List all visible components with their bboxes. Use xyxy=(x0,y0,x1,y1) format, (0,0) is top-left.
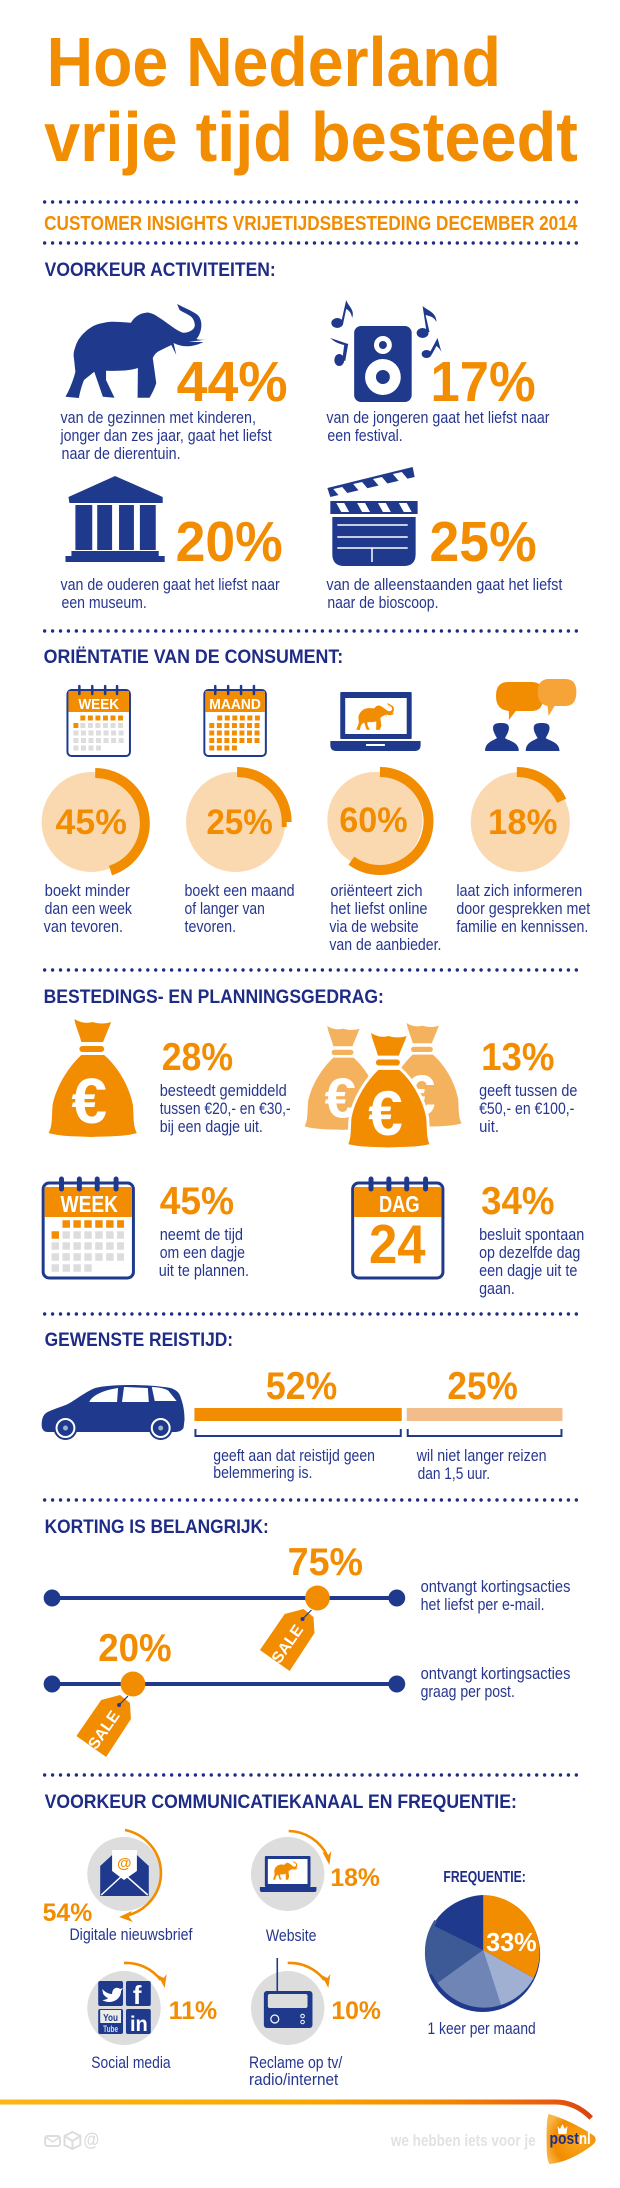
stat: 28%: 28% xyxy=(162,1036,233,1079)
heading: ORIËNTATIE VAN DE CONSUMENT: xyxy=(44,645,343,668)
icon: calendar dag 24: 24 xyxy=(369,1213,426,1275)
text: online: oriënteert zich xyxy=(330,882,423,900)
stat: 44%: 44% xyxy=(177,350,288,413)
stat: 52% bar: 52% xyxy=(266,1365,337,1408)
footer line xyxy=(0,2102,591,2118)
text: alleenstaanden: naar de bioscoop. xyxy=(327,594,438,612)
text: week: van tevoren. xyxy=(44,918,123,936)
text: per e-mail: ontvangt kortingsacties xyxy=(421,1578,570,1596)
text: niet langer reizen: dan 1,5 uur. xyxy=(418,1465,490,1483)
text: besluit spontaan xyxy=(479,1226,584,1298)
label: reclame xyxy=(249,2054,343,2089)
text: besteedt gemiddeld xyxy=(160,1082,291,1136)
text: online: van de aanbieder. xyxy=(329,936,441,954)
text: besteedt gemiddeld: bij een dagje uit. xyxy=(160,1118,263,1136)
panel: orientatie van de consument xyxy=(42,645,591,954)
text: alleenstaanden xyxy=(326,576,563,612)
panel: bestedings- en planningsgedrag xyxy=(43,987,584,1298)
chart: donut 60% xyxy=(327,772,429,870)
icon: sale tag 20%: SALE xyxy=(85,1708,124,1753)
stat: 34%: 34% xyxy=(481,1180,555,1223)
text: gesprekken: familie en kennissen. xyxy=(456,918,588,936)
text: geeft tussen: €50,- en €100,- xyxy=(479,1100,574,1118)
icon: speaker with music notes xyxy=(330,300,441,402)
text: niet langer reizen xyxy=(416,1447,547,1483)
chart: donut 18% xyxy=(467,772,570,872)
panel: gewenste reistijd xyxy=(42,1330,562,1483)
icon: calendar week large: WEEK xyxy=(61,1191,118,1217)
icon: calendar maand xyxy=(204,686,266,756)
text: per post xyxy=(421,1665,570,1701)
icon: calendar maand: MAAND xyxy=(209,696,261,713)
text: neemt de tijd: om een dagje xyxy=(160,1244,245,1262)
text: alleenstaanden: van de alleenstaanden gaat het liefst xyxy=(326,576,563,594)
text: ouderen: van de ouderen gaat het liefst naar xyxy=(61,576,280,594)
text: maand: tevoren. xyxy=(185,918,236,936)
text: ouderen: een museum. xyxy=(62,594,147,612)
panel: voorkeur activiteiten xyxy=(45,260,563,612)
heading: KORTING IS BELANGRIJK: xyxy=(45,1517,269,1538)
text: week xyxy=(44,882,133,936)
text: besteedt gemiddeld: besteedt gemiddeld xyxy=(160,1082,287,1100)
icon: two people talking xyxy=(485,679,576,751)
text: maand: of langer van xyxy=(185,900,265,918)
heading: BESTEDINGS- EN PLANNINGSGEDRAG: xyxy=(44,987,384,1008)
text: gezinnen xyxy=(60,409,272,463)
icon: social media: Tube xyxy=(103,2024,118,2034)
chart: donut 45%: 45% xyxy=(56,803,127,842)
text: neemt de tijd: uit te plannen. xyxy=(159,1262,249,1280)
icon: calendar week: WEEK xyxy=(78,696,119,713)
label: 1 keer per maand: 1 keer per maand xyxy=(428,2020,536,2038)
title: Hoe Nederland xyxy=(47,23,501,101)
text: per post: graag per post. xyxy=(421,1683,515,1701)
icon: social media: in xyxy=(130,2013,148,2036)
label: reclame: radio/internet xyxy=(249,2071,339,2089)
icon: elephant xyxy=(65,304,210,398)
stat: 11%: 11% xyxy=(169,1997,217,2025)
text: besluit spontaan: een dagje uit te xyxy=(479,1262,577,1280)
icon: radio xyxy=(251,1958,330,2045)
icon: museum xyxy=(65,476,165,562)
icon: calendar dag 24: DAG xyxy=(379,1191,420,1217)
text: gezinnen: naar de dierentuin. xyxy=(62,445,181,463)
icon: calendar week xyxy=(67,686,130,756)
icon: sale tag 20% xyxy=(76,1695,131,1757)
logo: postnl xyxy=(547,2114,596,2164)
stat: 25% bar xyxy=(407,1365,562,1436)
stat: 10%: 10% xyxy=(331,1997,381,2025)
text: week: dan een week xyxy=(45,900,133,918)
text: geeft tussen xyxy=(479,1082,577,1136)
text: neemt de tijd xyxy=(159,1226,249,1280)
heading: VOORKEUR ACTIVITEITEN: xyxy=(45,260,276,281)
icon: digitale nieuwsbrief xyxy=(87,1830,161,1922)
text: per post: ontvangt kortingsacties xyxy=(421,1665,570,1683)
text: gezinnen: jonger dan zes jaar, gaat het liefst xyxy=(60,427,272,445)
icon: digitale nieuwsbrief: @ xyxy=(117,1855,132,1872)
text: online: via de website xyxy=(329,918,419,936)
label: website: Website xyxy=(266,1927,316,1945)
icon: sale tag 75% xyxy=(260,1609,314,1671)
footer icons xyxy=(45,2130,99,2151)
icon: car xyxy=(42,1385,185,1439)
stat: 54%: 54% xyxy=(43,1899,92,1927)
stat: 75%: 75% xyxy=(288,1541,363,1584)
icon: laptop with elephant xyxy=(330,692,421,751)
text: niet langer reizen: wil niet langer reizen xyxy=(416,1447,547,1465)
text: maand: boekt een maand xyxy=(185,882,295,900)
footer icons: @ xyxy=(83,2130,99,2151)
text: online: het liefst online xyxy=(330,900,428,918)
stat: 25% bar: 25% xyxy=(447,1365,518,1408)
title: vrije tijd besteedt xyxy=(44,98,578,176)
text: gesprekken xyxy=(456,882,591,936)
icon: calendar week large xyxy=(43,1179,133,1278)
panel: voorkeur communicatiekanaal en frequentie xyxy=(43,1792,540,2089)
icon: three money bags: € xyxy=(404,1063,435,1127)
slider: 20% xyxy=(44,1672,405,1696)
icon: social media: You xyxy=(103,2013,118,2024)
stat: 25%: 25% xyxy=(430,510,537,573)
stat: 13%: 13% xyxy=(481,1036,555,1079)
chart: pie frequentie: 33% xyxy=(486,1929,537,1957)
text: jongeren: een festival. xyxy=(327,427,403,445)
icon: three money bags: € xyxy=(325,1066,356,1130)
icon: three money bags xyxy=(305,1023,462,1149)
text: ouderen xyxy=(61,576,280,612)
title xyxy=(44,23,578,176)
icon: clapperboard xyxy=(327,467,418,566)
stat: 20%: 20% xyxy=(98,1627,172,1670)
heading: VOORKEUR COMMUNICATIEKANAAL EN FREQUENTIE: xyxy=(45,1792,517,1813)
footer tagline: we hebben iets voor je xyxy=(390,2131,536,2150)
text: geeft tussen: uit. xyxy=(479,1118,499,1136)
stat: 18%: 18% xyxy=(330,1864,380,1892)
icon: money bag: € xyxy=(71,1065,107,1137)
text: gesprekken: door gesprekken met xyxy=(456,900,591,918)
text: reistijd geen belemmering: geeft aan dat reistijd geen xyxy=(213,1447,375,1465)
stat: 20%: 20% xyxy=(176,510,283,573)
heading: GEWENSTE REISTIJD: xyxy=(45,1330,233,1351)
text: online xyxy=(329,882,441,954)
icon: calendar dag 24 xyxy=(353,1179,443,1278)
chart: donut 60%: 60% xyxy=(339,801,408,840)
heading: frequentie: FREQUENTIE: xyxy=(443,1869,526,1886)
stat: 45%: 45% xyxy=(160,1180,234,1223)
text: reistijd geen belemmering: belemmering is. xyxy=(213,1464,312,1482)
text: besteedt gemiddeld: tussen €20,- en €30,- xyxy=(160,1100,291,1118)
label: reclame: Reclame op tv/ xyxy=(249,2054,343,2072)
icon: three money bags: € xyxy=(368,1080,403,1149)
text: besluit spontaan: op dezelfde dag xyxy=(479,1244,580,1262)
icon: social media xyxy=(87,1963,167,2045)
chart: pie frequentie xyxy=(425,1895,540,2012)
label: digitale nieuwsbrief: Digitale nieuwsbrief xyxy=(69,1926,193,1944)
chart: donut 25% xyxy=(186,772,287,872)
text: jongeren: van de jongeren gaat het liefst naar xyxy=(326,409,550,427)
chart: donut 25%: 25% xyxy=(206,803,273,842)
icon: website xyxy=(251,1831,331,1911)
icon: sale tag 75%: SALE xyxy=(269,1622,307,1667)
slider: 75% xyxy=(44,1586,405,1610)
text: geeft tussen: geeft tussen de xyxy=(479,1082,577,1100)
icon: money bag xyxy=(49,1019,137,1137)
text: besluit spontaan: gaan. xyxy=(479,1280,515,1298)
text: gezinnen: van de gezinnen met kinderen, xyxy=(61,409,256,427)
chart: donut 45% xyxy=(42,772,145,873)
chart: donut 18%: 18% xyxy=(488,803,558,842)
stat: 52% bar xyxy=(194,1365,402,1436)
text: gesprekken: laat zich informeren xyxy=(456,882,582,900)
text: week: boekt minder xyxy=(45,882,130,900)
stat: 17%: 17% xyxy=(431,350,536,413)
text: per e-mail: het liefst per e-mail. xyxy=(421,1596,545,1614)
icon: social media: f xyxy=(133,1982,142,2010)
logo: postnl: nl xyxy=(579,2129,591,2148)
text: jongeren xyxy=(326,409,550,445)
text: besluit spontaan: besluit spontaan xyxy=(479,1226,584,1244)
label: social media: Social media xyxy=(91,2054,171,2072)
panel: korting is belangrijk xyxy=(44,1517,570,1757)
text: neemt de tijd: neemt de tijd xyxy=(160,1226,243,1244)
text: per e-mail xyxy=(421,1578,570,1614)
logo: postnl: post xyxy=(550,2129,579,2148)
text: reistijd geen belemmering xyxy=(213,1447,375,1482)
text: maand xyxy=(185,882,295,936)
